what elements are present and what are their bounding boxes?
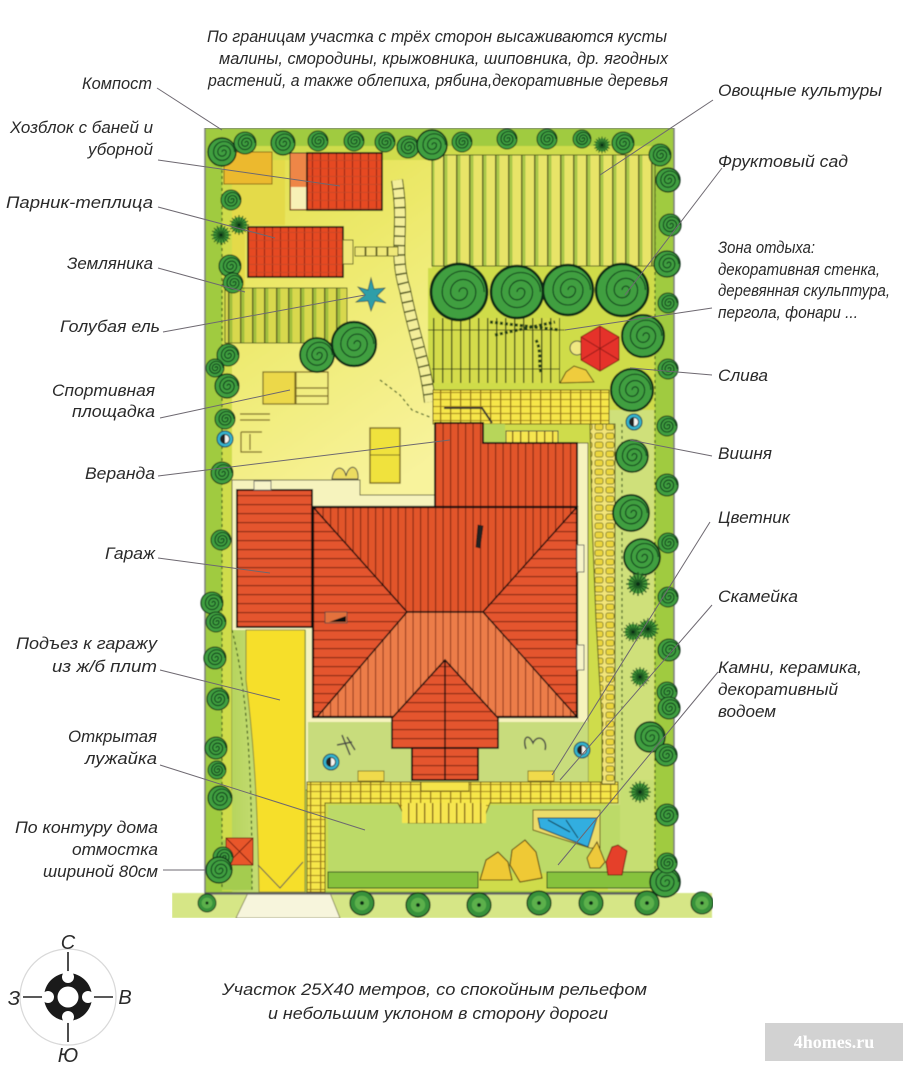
label: rest zone: декоративная стенка, xyxy=(718,260,880,279)
label: outbuilding: уборной xyxy=(87,140,154,159)
window bays xyxy=(254,481,584,670)
label: perimeter paving xyxy=(15,818,205,881)
label: rest zone: деревянная скульптура, xyxy=(718,281,890,300)
label: open lawn: Открытая xyxy=(68,727,157,746)
small shed xyxy=(226,838,253,865)
compost xyxy=(224,152,272,184)
stepping stones along house xyxy=(590,424,615,784)
intro text: По границам участка с трёх сторон высаживаются кусты xyxy=(207,27,667,46)
label: driveway: из ж/б плит xyxy=(52,657,157,676)
label: garage: Гараж xyxy=(105,544,156,563)
perimeter shrubs xyxy=(201,129,681,883)
watermark: 4homes.ru xyxy=(794,1032,874,1052)
lot ground xyxy=(172,128,712,918)
front flower beds xyxy=(337,735,554,781)
blue spruce xyxy=(356,278,386,311)
label: cherry: Вишня xyxy=(718,444,772,463)
bottom caption xyxy=(221,980,647,1023)
label: vegetables: Овощные культуры xyxy=(718,81,882,100)
label: cherry xyxy=(630,440,772,463)
bottom caption: и небольшим уклоном в сторону дороги xyxy=(268,1004,609,1023)
watermark xyxy=(765,1023,903,1061)
compass rose xyxy=(8,932,132,1067)
decorative pond xyxy=(533,810,600,848)
yard pad and bushes xyxy=(332,428,400,483)
label: plum xyxy=(630,366,768,385)
outbuilding with bathhouse xyxy=(290,153,382,210)
label: perimeter paving: шириной 80см xyxy=(43,862,158,881)
compass rose: Ю xyxy=(58,1045,78,1067)
lanterns xyxy=(217,414,642,770)
pergola and decorative wall xyxy=(428,318,565,383)
large fruit trees xyxy=(300,264,680,897)
label: blue spruce: Голубая ель xyxy=(60,317,160,336)
label: compost: Компост xyxy=(82,74,152,93)
driveway xyxy=(246,630,305,892)
label: sports ground: площадка xyxy=(72,402,155,421)
ceramic fireplace xyxy=(587,842,627,875)
label: rest zone: Зона отдыха: xyxy=(718,238,815,257)
label: driveway: Подъез к гаражу xyxy=(16,634,159,653)
label: orchard xyxy=(625,152,848,295)
label: veranda: Веранда xyxy=(85,464,155,483)
garden stones by pergola xyxy=(560,366,594,383)
label: rest zone xyxy=(565,238,890,330)
label: bench: Скамейка xyxy=(718,587,798,606)
label: greenhouse: Парник-теплица xyxy=(6,193,153,212)
label: stones and pond xyxy=(558,658,862,865)
bottom caption: Участок 25Х40 метров, со спокойным рельефом xyxy=(221,980,647,999)
label: greenhouse xyxy=(6,193,275,238)
label: compost xyxy=(82,74,222,130)
label: outbuilding xyxy=(9,118,340,186)
site plan xyxy=(172,128,713,918)
umbrella xyxy=(570,326,619,371)
label: bench xyxy=(560,587,798,780)
strawberry beds xyxy=(225,288,347,343)
label: veranda xyxy=(85,440,450,483)
label: rest zone: пергола, фонари ... xyxy=(718,303,858,322)
label: orchard: Фруктовый сад xyxy=(718,152,848,171)
intro text: малины, смородины, крыжовника, шиповника, др. ягодных xyxy=(219,49,668,68)
label: flower bed: Цветник xyxy=(718,508,791,527)
label: garage xyxy=(105,544,270,573)
compass rose: З xyxy=(8,988,20,1010)
compass rose: В xyxy=(118,987,132,1009)
label: outbuilding: Хозблок с баней и xyxy=(9,118,154,137)
steps between greenhouse and path xyxy=(343,240,398,264)
vegetable beds xyxy=(432,155,655,266)
label: sports ground: Спортивная xyxy=(52,381,155,400)
compass rose: С xyxy=(61,932,76,954)
label: open lawn xyxy=(68,727,365,830)
label: open lawn: лужайка xyxy=(84,749,157,768)
decorative stones xyxy=(480,840,542,882)
label: stones and pond: Камни, керамика, xyxy=(718,658,862,677)
label: plum: Слива xyxy=(718,366,768,385)
greenhouse xyxy=(248,227,343,277)
label: blue spruce xyxy=(60,295,365,336)
label: strawberry xyxy=(67,254,245,292)
label: strawberry: Земляника xyxy=(67,254,153,273)
label: vegetables xyxy=(600,81,882,175)
label: driveway xyxy=(16,634,280,700)
intro text: растений, а также облепиха, рябина,декоративные деревья xyxy=(207,71,668,90)
label: sports ground xyxy=(52,381,290,421)
spiky shrubs xyxy=(211,136,659,803)
veranda paving xyxy=(433,390,609,443)
label: perimeter paving: По контуру дома xyxy=(15,818,158,837)
label: stones and pond: декоративный xyxy=(718,680,839,699)
intro text xyxy=(207,27,668,90)
label: perimeter paving: отмостка xyxy=(72,840,158,859)
house roof xyxy=(237,423,577,780)
label: flower bed xyxy=(552,508,791,775)
stone path xyxy=(397,180,430,402)
front paving xyxy=(307,782,618,892)
roadside trees xyxy=(198,891,713,917)
sports ground xyxy=(240,372,328,452)
label: stones and pond: водоем xyxy=(718,702,776,721)
